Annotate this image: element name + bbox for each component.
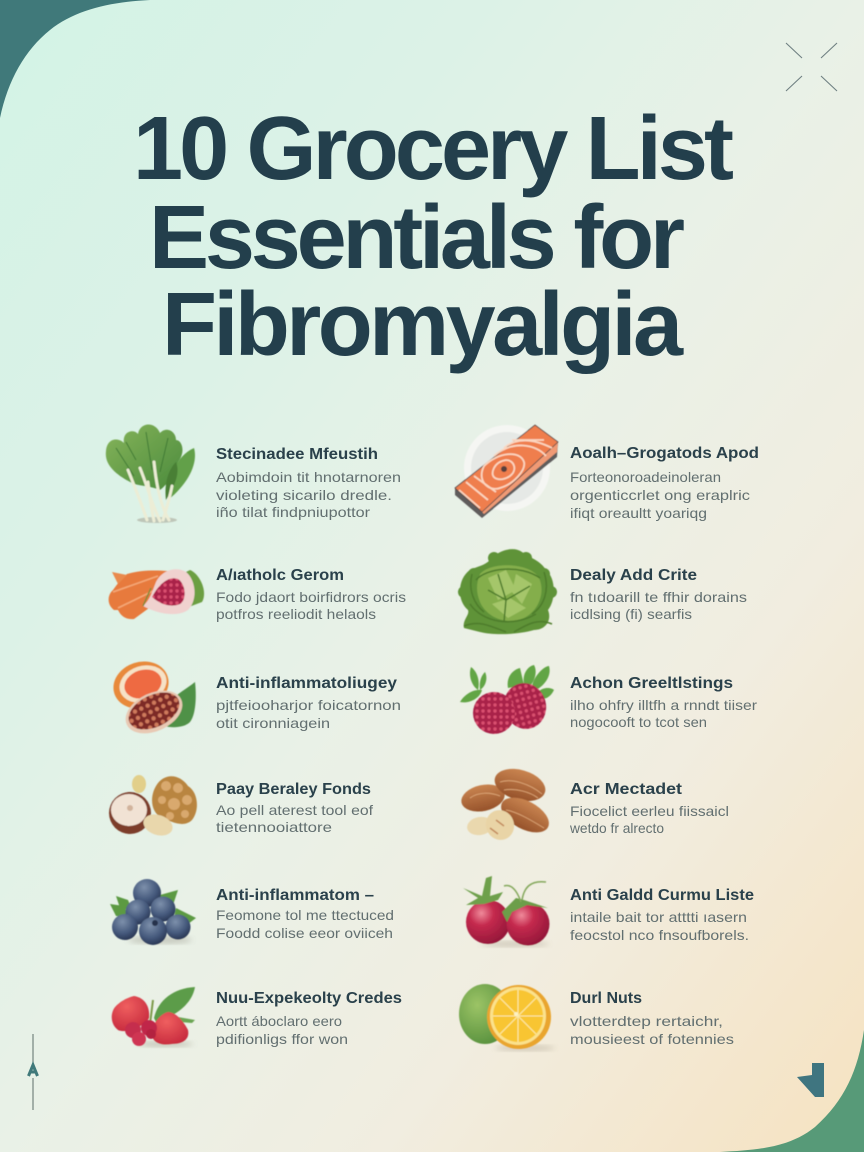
list item: right 6	[459, 976, 734, 1058]
list item: right 4	[459, 763, 729, 844]
text block	[216, 567, 406, 622]
text block: Aoalh–Grogatods Apod	[570, 445, 759, 462]
text block: Forteonoroadeinoleran	[570, 469, 721, 485]
text block: feocstol nco fnsoufborels.	[570, 927, 749, 943]
text block	[216, 675, 401, 731]
icon: decorative crosshair	[786, 43, 837, 91]
text block: fn tıdoarill te ffhir dorains	[570, 589, 747, 605]
text block: nogocooft to tcot sen	[570, 714, 707, 730]
icon: lettuce	[458, 549, 557, 634]
icon: lime and lemon	[459, 976, 560, 1058]
list item: left 3	[107, 654, 401, 742]
text block: A/ıatholc Gerom	[216, 567, 344, 584]
text block: Achon Greeltlstings	[570, 675, 733, 692]
title: Fibromyalgia	[162, 275, 684, 375]
corner: bottom right green	[720, 1030, 864, 1152]
text block: tietennooiattore	[216, 819, 332, 835]
list item: left 5	[110, 879, 394, 945]
text block: Acr Mectadet	[570, 781, 683, 798]
icon: leafy greens	[106, 424, 195, 523]
text block: otit cironniagein	[216, 715, 330, 731]
list item: left 4	[109, 775, 373, 839]
icon: strawberries and raspberries	[112, 987, 195, 1047]
icon: salmon and fig	[109, 569, 204, 619]
text block: iño tilat findpniupottor	[216, 504, 370, 520]
text block	[216, 990, 402, 1047]
text block: pdifionligs ffor won	[216, 1031, 348, 1047]
text block: Anti-inflammatoliugey	[216, 675, 397, 692]
title	[133, 99, 734, 375]
text block: violeting sicarilo dredle.	[216, 487, 392, 503]
icon: almonds	[459, 763, 555, 844]
text block: intaile bait tor atttti ıasern	[570, 909, 747, 925]
text block: Anti-inflammatom –	[216, 887, 374, 904]
text block: pjtfeiooharjor foicatornon	[216, 697, 401, 713]
icon: blueberries	[110, 879, 196, 945]
text block: orgenticcrlet ong eraplric	[570, 487, 750, 503]
text block: Nuu-Expekeolty Credes	[216, 990, 402, 1007]
text block: Anti Galdd Curmu Liste	[570, 887, 754, 904]
text block: Paay Beraley Fonds	[216, 781, 371, 798]
list item: right 3	[460, 665, 757, 734]
text block	[570, 990, 734, 1047]
text block: Dealy Add Crite	[570, 567, 697, 584]
text block: Durl Nuts	[570, 990, 642, 1007]
text block	[216, 781, 373, 835]
text block: ifiqt oreaultt yoariqg	[570, 505, 707, 521]
text block: Foodd colise eeor oviiceh	[216, 925, 393, 941]
list item: right 1	[455, 425, 759, 521]
text block	[570, 675, 757, 730]
text block: Stecinadee Mfeustih	[216, 446, 378, 463]
list item: left 1	[106, 424, 401, 523]
corner: top left teal	[0, 0, 150, 118]
text block: Feomone tol me ttectuced	[216, 907, 394, 923]
text block: potfros reeliodit helaols	[216, 606, 376, 622]
icon: bottom right arrow	[797, 1063, 824, 1097]
icon: raspberries	[460, 665, 554, 734]
list item: right 5	[463, 876, 754, 947]
text block: Fiocelict eerleu fiissaicl	[570, 803, 729, 819]
text block: Fodo jdaort boirfidrors ocris	[216, 589, 406, 605]
icon: walnut and nuts	[109, 775, 197, 839]
text block: mousieest of fotennies	[570, 1031, 734, 1047]
list item: left 6	[112, 987, 402, 1047]
icon: vertical arrow marker	[28, 1034, 38, 1110]
text block: Aobimdoin tit hnotarnoren	[216, 469, 401, 485]
text block	[569, 781, 729, 836]
text block: vlotterdtep rertaichr,	[570, 1013, 723, 1029]
list item: left 2	[109, 567, 406, 622]
text block: ilho ohfry illtfh a rnndt tiiser	[570, 697, 757, 713]
text block: icdlsing (fi) searfis	[570, 606, 692, 622]
title: Essentials for	[149, 188, 685, 288]
icon: orange and cocoa pod	[107, 654, 196, 742]
text block: wetdo fr alrecto	[569, 820, 664, 836]
title: 10 Grocery List	[133, 99, 734, 199]
icon: salmon fillet on plate	[455, 425, 558, 518]
text block	[570, 445, 759, 521]
list item: right 2	[458, 549, 747, 634]
text block: Aortt áboclaro eero	[216, 1013, 342, 1029]
text block: Ao pell aterest tool eof	[216, 802, 373, 818]
text block	[216, 887, 394, 941]
text block	[570, 567, 747, 622]
text block	[216, 446, 401, 520]
text block	[570, 887, 754, 943]
icon: red fruits	[463, 876, 550, 947]
